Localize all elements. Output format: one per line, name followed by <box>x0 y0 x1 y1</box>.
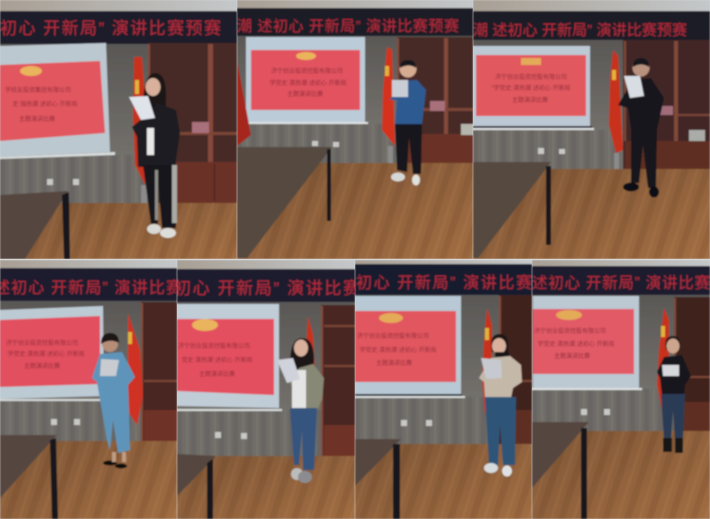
panel: speaker 6, woman in patterned sweater <box>355 260 532 519</box>
projector screen: 学校友投资集团有限公司 <box>5 86 71 94</box>
projector screen: 主题演讲比赛 <box>512 96 548 104</box>
LED banner <box>0 11 237 44</box>
LED banner: 潮 述初心 开新局” 演讲比赛预赛 <box>473 22 687 39</box>
table <box>177 454 216 519</box>
table <box>0 191 70 259</box>
projector screen: 主题演讲比赛 <box>19 115 55 123</box>
panel: speaker 3, man in black <box>473 0 710 259</box>
projector screen: 主题演讲比赛 <box>199 370 235 378</box>
bookcase <box>321 305 355 465</box>
panel: speaker 7, woman in black top <box>532 260 710 519</box>
projector screen <box>473 46 594 130</box>
LED banner: 潮 述初心 开新局” 演讲比赛预赛 <box>237 18 459 35</box>
LED banner: 初心 开新局” 演讲比赛预赛 <box>0 18 221 38</box>
projector screen: 学党史 清热潮 述初心 开新局 <box>7 350 85 358</box>
projector screen: 学党史 清热潮 述初心 开新局 <box>537 340 615 348</box>
bookcase <box>148 43 237 203</box>
flag <box>127 313 143 425</box>
projector screen <box>245 37 368 124</box>
flag <box>609 50 623 153</box>
panel: speaker 4, woman in blue jumpsuit <box>0 260 182 519</box>
LED banner <box>473 11 710 40</box>
table <box>0 435 58 519</box>
person <box>390 60 426 186</box>
projector screen <box>0 43 115 159</box>
projector screen: 学党史 清热潮 述初心 开新局 <box>359 346 437 354</box>
person <box>129 73 180 238</box>
projector screen: 主题演讲比赛 <box>554 352 590 360</box>
bookcase <box>623 40 710 173</box>
projector screen: 济宁创业投资控股有限公司 <box>534 327 606 335</box>
projector screen: 党史 清热潮 述初心 开新局 <box>181 356 253 364</box>
bookcase <box>397 37 473 165</box>
LED banner <box>532 266 710 295</box>
bookcase <box>499 295 532 450</box>
flag <box>482 308 492 415</box>
person <box>277 338 324 483</box>
flags <box>237 47 395 166</box>
flag <box>133 57 146 185</box>
projector screen: 主题演讲比赛 <box>376 359 412 367</box>
table <box>532 422 589 519</box>
projector screen: 济宁创业投资控股有限公司 <box>495 73 567 81</box>
LED banner: 初心 开新局” 演讲比赛 <box>356 273 532 292</box>
projector screen: 史 强热潮 述初心 开新局 <box>12 100 78 108</box>
projector screen <box>177 304 282 411</box>
person <box>92 333 135 468</box>
panel: speaker 2, man in blue shirt <box>237 0 473 259</box>
projector screen: 主题演讲比赛 <box>287 90 323 98</box>
table <box>237 147 332 258</box>
LED banner <box>237 8 473 36</box>
table <box>473 162 551 258</box>
projector screen: 济宁创业投资控股有限公司 <box>357 332 429 340</box>
projector screen: 主题演讲比赛 <box>24 362 60 370</box>
flag <box>657 308 669 415</box>
person <box>618 58 664 198</box>
projector screen <box>0 306 106 401</box>
projector screen: 济宁创业投资控股有限公司 <box>271 67 343 75</box>
table <box>355 439 401 519</box>
projector screen <box>355 296 465 398</box>
person <box>479 334 522 476</box>
person <box>657 336 691 453</box>
projector screen: 济宁创业投资控股有限公司 <box>6 339 78 347</box>
bookcase <box>141 302 177 443</box>
panel: speaker 5, woman in olive jacket <box>174 260 360 519</box>
projector screen: 济宁创业投资控股有限公司 <box>178 342 250 350</box>
projector screen: “学党史 清热潮 述初心 开新局 <box>492 84 570 92</box>
panel: speaker 1, woman in black jacket <box>0 0 237 259</box>
projector screen: 学党史 清热潮 述初心 开新局 <box>269 79 347 87</box>
flag <box>306 316 316 366</box>
LED banner: 述初心 开新局” 演讲比赛 <box>532 273 710 292</box>
LED banner <box>355 264 532 295</box>
LED banner <box>174 269 360 302</box>
LED banner <box>0 268 182 301</box>
bookcase <box>674 297 710 438</box>
LED banner: 初心 开新局” 演讲比赛 <box>174 278 360 298</box>
projector screen <box>532 296 642 390</box>
